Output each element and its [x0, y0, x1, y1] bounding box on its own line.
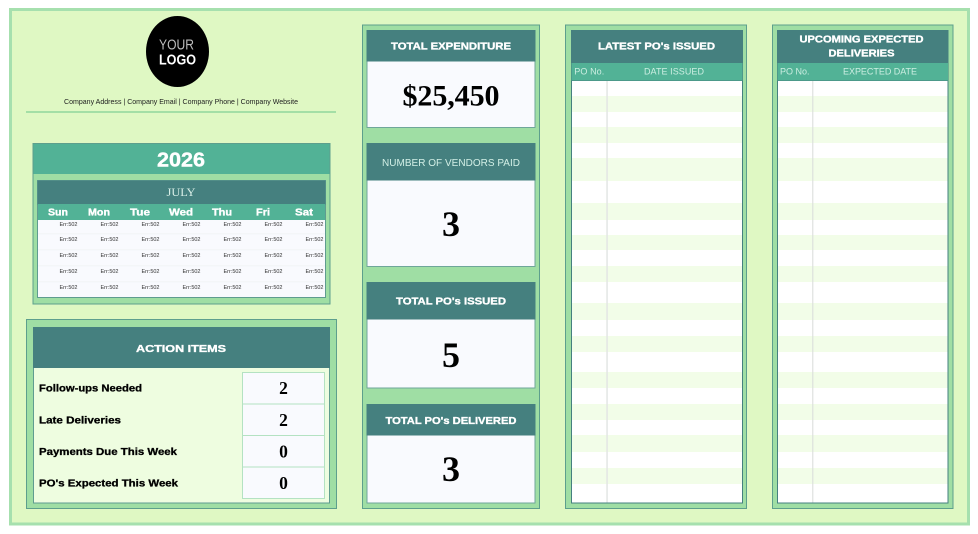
upcoming deliveries column headers: [778, 63, 948, 80]
icon: logo badge: YOUR: [159, 38, 194, 54]
company contact line: Company Address | Company Email | Company Phone | Company Website: [64, 97, 298, 106]
panel: action items: [26, 320, 336, 508]
metric: PO's issued: 5: [442, 335, 460, 375]
upcoming deliveries column headers: PO No.: [780, 66, 810, 76]
calendar date grid: Err:502: [59, 269, 78, 275]
calendar date grid: Err:502: [182, 222, 200, 228]
upcoming deliveries column headers: EXPECTED DATE: [843, 66, 917, 76]
weekday header row: Fri: [256, 208, 270, 218]
metric: PO's issued: [366, 282, 536, 388]
calendar date grid: Err:502: [305, 237, 324, 243]
calendar date grid: Err:502: [264, 222, 282, 228]
action row: late deliveries: [39, 404, 324, 436]
calendar date grid: Err:502: [264, 237, 282, 243]
calendar date grid: Err:502: [100, 222, 118, 228]
icon: logo badge: [146, 16, 209, 87]
calendar date grid: Err:502: [100, 237, 118, 243]
calendar date grid: Err:502: [264, 285, 282, 291]
latest PO's heading: LATEST PO's ISSUED: [598, 42, 715, 52]
panel: upcoming expected deliveries: [772, 25, 953, 508]
calendar date grid: Err:502: [182, 237, 200, 243]
metric: total expenditure: [366, 30, 536, 128]
calendar date grid: Err:502: [223, 253, 242, 259]
calendar date grid: Err:502: [141, 285, 160, 291]
action row: expected this week: [39, 467, 324, 498]
metric: total expenditure: $25,450: [402, 80, 500, 112]
calendar date grid: Err:502: [141, 237, 160, 243]
calendar date grid: Err:502: [141, 253, 160, 259]
action row: late deliveries: 2: [279, 410, 288, 430]
calendar month: JULY: [166, 185, 196, 199]
panel: key metrics: [362, 25, 540, 508]
calendar date grid: Err:502: [264, 269, 282, 275]
latest PO's column headers: PO No.: [574, 66, 604, 76]
action row: payments due: 0: [279, 442, 288, 462]
calendar year: 2026: [157, 150, 205, 172]
calendar date grid: Err:502: [100, 269, 118, 275]
latest PO's column headers: [572, 63, 742, 80]
calendar date grid: Err:502: [223, 237, 242, 243]
upcoming deliveries heading: DELIVERIES: [828, 49, 895, 60]
action row: late deliveries: Late Deliveries: [39, 416, 121, 426]
metric: PO's issued: TOTAL PO's ISSUED: [396, 296, 506, 308]
action row: expected this week: 0: [279, 473, 288, 493]
calendar date grid: Err:502: [182, 253, 200, 259]
calendar date grid: Err:502: [141, 269, 160, 275]
action row: payments due: [39, 436, 324, 467]
weekday header row: Thu: [212, 208, 232, 218]
calendar date grid: Err:502: [305, 269, 324, 275]
calendar date grid: Err:502: [59, 285, 78, 291]
weekday header row: Mon: [88, 208, 110, 218]
calendar date grid: Err:502: [100, 253, 118, 259]
upcoming deliveries heading: [800, 35, 924, 60]
weekday header row: Wed: [169, 208, 193, 218]
metric: PO's delivered: 3: [442, 449, 460, 489]
calendar date grid: Err:502: [141, 222, 160, 228]
metric: PO's delivered: TOTAL PO's DELIVERED: [386, 416, 516, 427]
action row: follow-ups needed: 2: [279, 378, 288, 398]
metric: PO's delivered: [366, 404, 536, 503]
calendar date grid: Err:502: [223, 285, 242, 291]
weekday header row: Tue: [130, 208, 151, 218]
action row: expected this week: PO's Expected This Week: [39, 478, 178, 490]
metric: total expenditure: TOTAL EXPENDITURE: [391, 42, 511, 52]
metric: vendors paid: [366, 143, 536, 266]
calendar date grid: Err:502: [264, 253, 282, 259]
upcoming deliveries table rows: [778, 81, 948, 502]
weekday header row: [38, 204, 325, 220]
calendar date grid: [38, 222, 325, 291]
latest PO's column headers: DATE ISSUED: [644, 66, 704, 76]
metric: vendors paid: NUMBER OF VENDORS PAID: [382, 158, 520, 169]
calendar date grid: Err:502: [223, 269, 242, 275]
action items heading: ACTION ITEMS: [136, 344, 226, 355]
weekday header row: Sun: [48, 208, 68, 218]
icon: logo badge: LOGO: [159, 52, 196, 68]
action row: payments due: Payments Due This Week: [39, 447, 177, 458]
action row: follow-ups needed: Follow-ups Needed: [39, 384, 142, 394]
calendar date grid: Err:502: [59, 237, 78, 243]
latest PO's table rows: [572, 81, 742, 502]
company header: [26, 16, 336, 113]
calendar date grid: Err:502: [305, 253, 324, 259]
panel: latest PO's issued: [566, 25, 746, 508]
calendar date grid: Err:502: [59, 222, 78, 228]
upcoming deliveries heading: UPCOMING EXPECTED: [800, 35, 924, 46]
panel: calendar: [33, 144, 330, 304]
calendar date grid: Err:502: [182, 269, 200, 275]
calendar date grid: Err:502: [305, 222, 324, 228]
weekday header row: Sat: [295, 208, 314, 218]
calendar date grid: Err:502: [59, 253, 78, 259]
metric: vendors paid: 3: [442, 204, 460, 244]
calendar date grid: Err:502: [100, 285, 118, 291]
calendar date grid: Err:502: [305, 285, 324, 291]
action row: follow-ups needed: [39, 372, 324, 404]
calendar date grid: Err:502: [223, 222, 242, 228]
calendar date grid: Err:502: [182, 285, 200, 291]
